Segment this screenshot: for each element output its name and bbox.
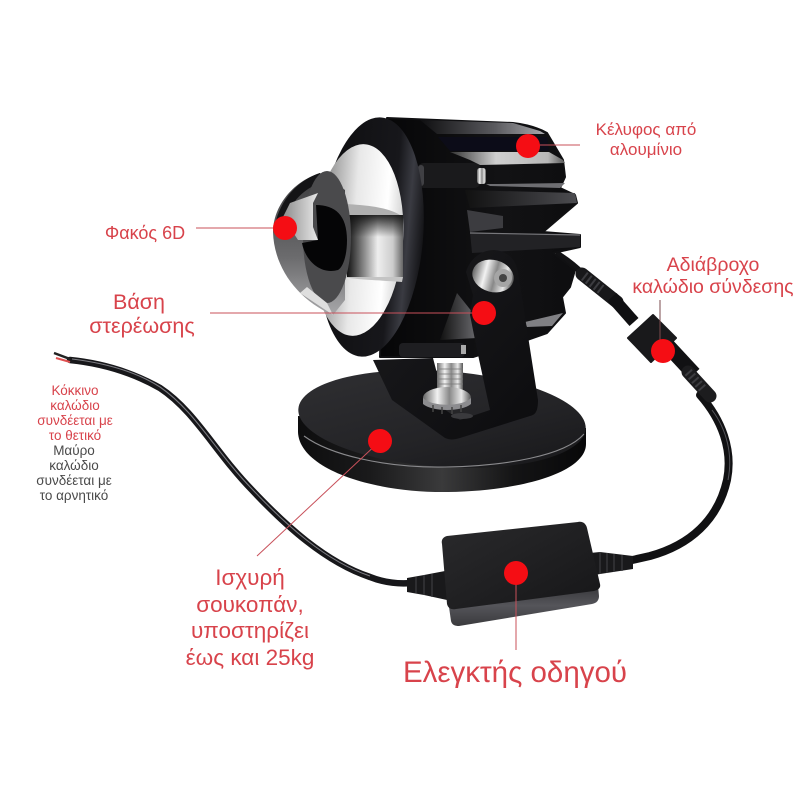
- collar highlight: [440, 293, 477, 340]
- callout: strong suction cup: υποστηρίζει: [191, 618, 309, 643]
- callout: aluminum shell: αλουμίνιο: [610, 140, 682, 159]
- callout: 6D lens: [105, 216, 297, 243]
- icon: magnetic base: [295, 361, 589, 492]
- callout: wiring note: [36, 383, 113, 503]
- waterproof connector: [582, 274, 710, 396]
- callout: wiring note: το αρνητικό: [40, 488, 108, 503]
- bracket: [373, 250, 538, 440]
- callout: wiring note: συνδέεται με: [36, 473, 112, 488]
- callout: wiring note: το θετικό: [49, 428, 101, 443]
- callout: strong suction cup: έως και 25kg: [186, 645, 314, 670]
- callout: waterproof connection cable: [632, 254, 794, 363]
- callout: wiring note: Κόκκινο: [51, 383, 99, 398]
- callout: strong suction cup: [186, 429, 392, 670]
- callout: mounting bracket: Βάση: [113, 290, 165, 314]
- callout: driver controller: [403, 561, 627, 689]
- side pins: [399, 163, 486, 357]
- callout: wiring note: συνδέεται με: [37, 413, 113, 428]
- callout: waterproof connection cable: Αδιάβροχο: [667, 254, 759, 276]
- callout: strong suction cup: σουκοπάν,: [196, 592, 304, 617]
- bracket screw: [469, 255, 517, 297]
- callout: mounting bracket: στερέωσης: [89, 314, 195, 338]
- callout: driver controller: Ελεγκτής οδηγού: [403, 656, 627, 689]
- cable: power lead: [54, 353, 412, 583]
- callout: aluminum shell: [516, 120, 696, 159]
- cable: connector lead: [556, 253, 730, 561]
- lens: [273, 141, 410, 339]
- icon: lamp housing: [273, 113, 580, 440]
- callout: wiring note: καλώδιο: [50, 398, 100, 413]
- bezel ring: [309, 113, 433, 361]
- callout: wiring note: Μαύρο: [53, 443, 95, 458]
- mounting bolt stud: [423, 363, 473, 419]
- callout: strong suction cup: Ισχυρή: [215, 565, 285, 590]
- callout: 6D lens: Φακός 6D: [105, 223, 185, 243]
- callout: waterproof connection cable: καλώδιο σύνδεσης: [632, 276, 794, 298]
- callout: mounting bracket: [89, 290, 496, 338]
- callout: wiring note: καλώδιο: [49, 458, 99, 473]
- icon: driver controller box: [407, 522, 633, 626]
- callout: aluminum shell: Κέλυφος από: [596, 120, 696, 139]
- fins: [420, 120, 580, 327]
